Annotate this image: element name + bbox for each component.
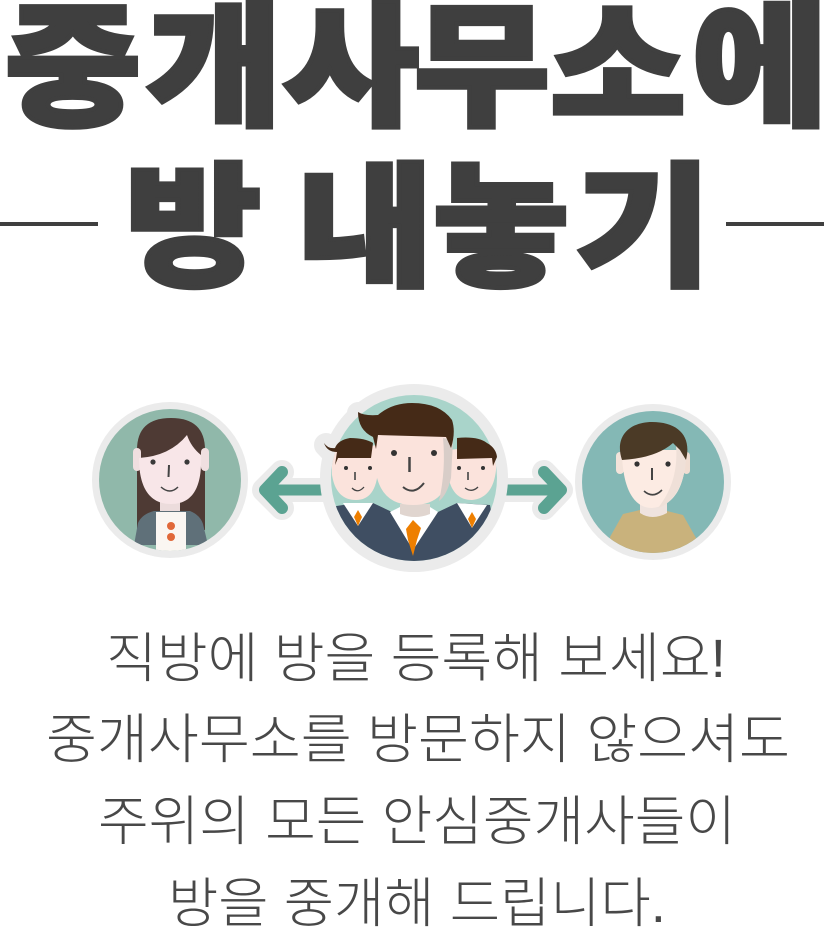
body text line 1: 직방에 방을 등록해 보세요!: [106, 629, 726, 689]
body text line 2: 중개사무소를 방문하지 않으셔도: [46, 710, 790, 770]
left dash: [0, 222, 98, 226]
body text line 3: 주위의 모든 안심중개사들이: [98, 792, 736, 852]
icon: left arrow: [264, 472, 325, 508]
icon: right arrow: [503, 472, 561, 508]
agent centre face: [376, 435, 447, 505]
right dash: [726, 222, 824, 226]
agent centre collar: [390, 507, 438, 550]
icon: man avatar: [575, 404, 731, 560]
icon: real estate agents group: [320, 384, 508, 572]
suits: [336, 503, 491, 561]
agent left: [332, 445, 378, 526]
icon: woman avatar: [92, 402, 248, 558]
agent right: [448, 445, 496, 528]
hair left: [324, 438, 373, 465]
hair centre: [358, 403, 454, 449]
title line 2: 방 내놓기: [125, 153, 711, 304]
hair right: [457, 438, 497, 466]
